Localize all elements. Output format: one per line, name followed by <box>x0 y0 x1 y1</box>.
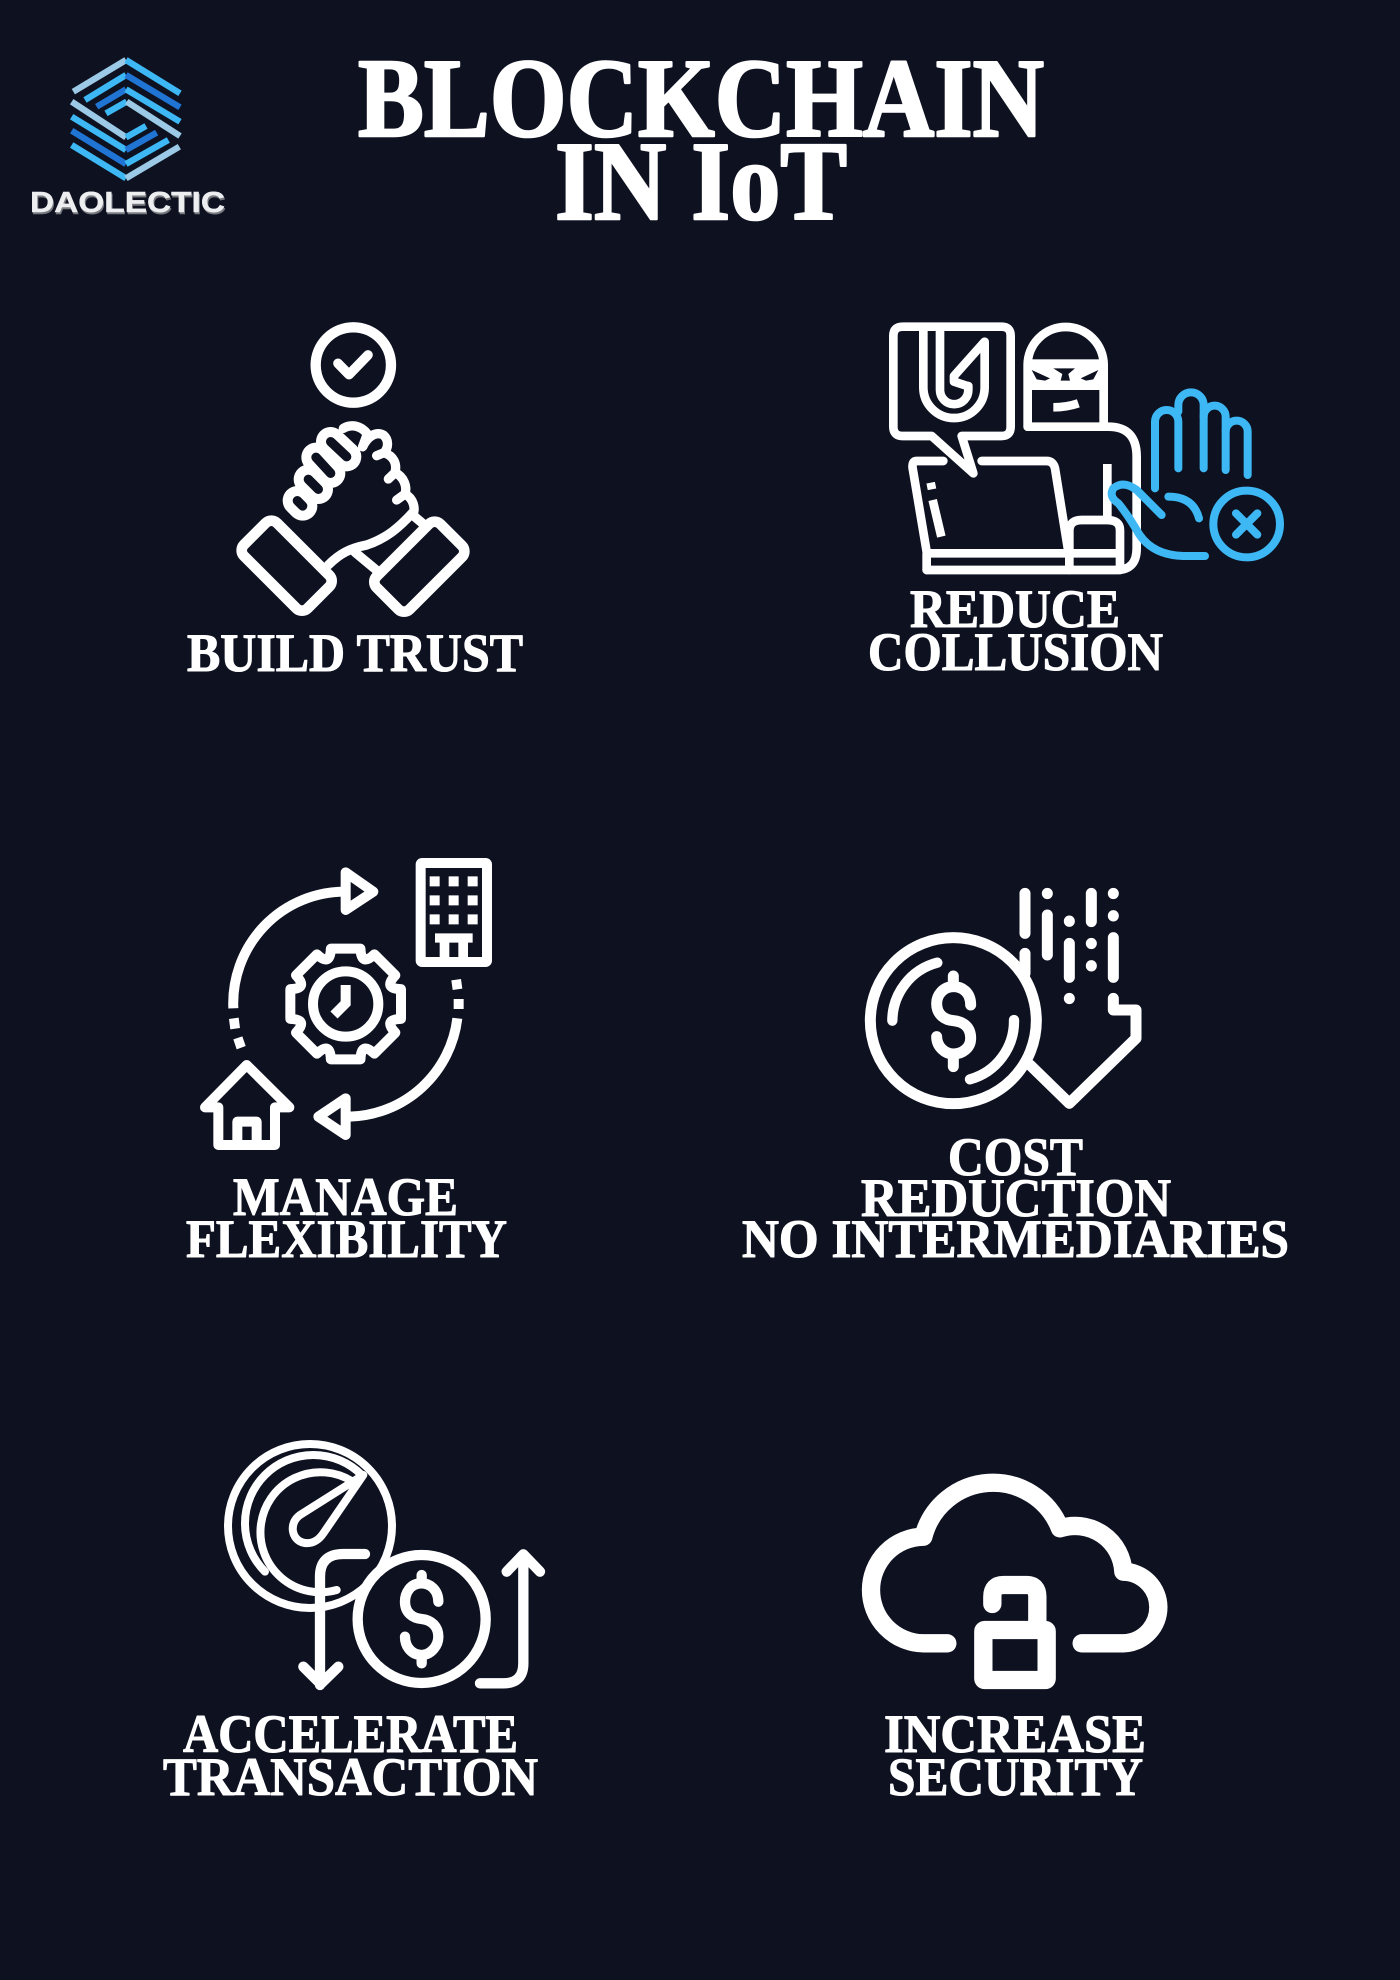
label: increase security: INCREASE <box>884 1704 1146 1764</box>
label: manage flexibility: FLEXIBILITY <box>186 1209 507 1269</box>
label: increase security <box>884 1704 1146 1807</box>
icon: cloud with open padlock <box>871 1483 1158 1680</box>
label: cost reduction, no intermediaries <box>742 1127 1289 1269</box>
panel: accelerate transaction <box>163 1444 540 1807</box>
label: increase security: SECURITY <box>888 1747 1143 1807</box>
label: build trust: BUILD TRUST <box>187 623 523 683</box>
title: IN IoT <box>555 120 847 244</box>
panel: increase security <box>871 1483 1158 1807</box>
logo wordmark: DAOLECTIC <box>30 187 225 219</box>
title <box>358 37 1044 244</box>
label: reduce collusion: COLLUSION <box>868 622 1163 682</box>
icon: speedometer and dollar coin with arrows <box>228 1444 540 1685</box>
label: reduce collusion: REDUCE <box>910 579 1120 639</box>
panel: manage flexibility <box>186 863 507 1269</box>
title: BLOCKCHAIN <box>358 37 1044 161</box>
panel: reduce collusion <box>868 327 1280 682</box>
panel: build trust <box>187 327 523 683</box>
panel: cost reduction <box>742 893 1289 1269</box>
label: accelerate transaction: ACCELERATE <box>183 1704 518 1764</box>
icon: hexagon logo mark <box>72 60 180 178</box>
logo: Daolectic <box>30 60 225 219</box>
label: manage flexibility <box>186 1167 507 1269</box>
label: cost reduction, no intermediaries: NO INTERMEDIARIES <box>742 1209 1289 1269</box>
icon: dollar coin with falling arrow <box>870 893 1136 1104</box>
label: reduce collusion <box>868 579 1163 682</box>
label: accelerate transaction: TRANSACTION <box>163 1747 538 1807</box>
label: cost reduction, no intermediaries: REDUCTION <box>861 1168 1171 1228</box>
icon: gear clock between home and office <box>205 863 487 1145</box>
label: manage flexibility: MANAGE <box>233 1167 458 1227</box>
icon: handshake with check mark <box>238 327 468 615</box>
label: cost reduction, no intermediaries: COST <box>948 1127 1083 1187</box>
icon: phishing hook bubble, thief and laptop <box>893 327 1280 570</box>
label: accelerate transaction <box>163 1704 538 1807</box>
